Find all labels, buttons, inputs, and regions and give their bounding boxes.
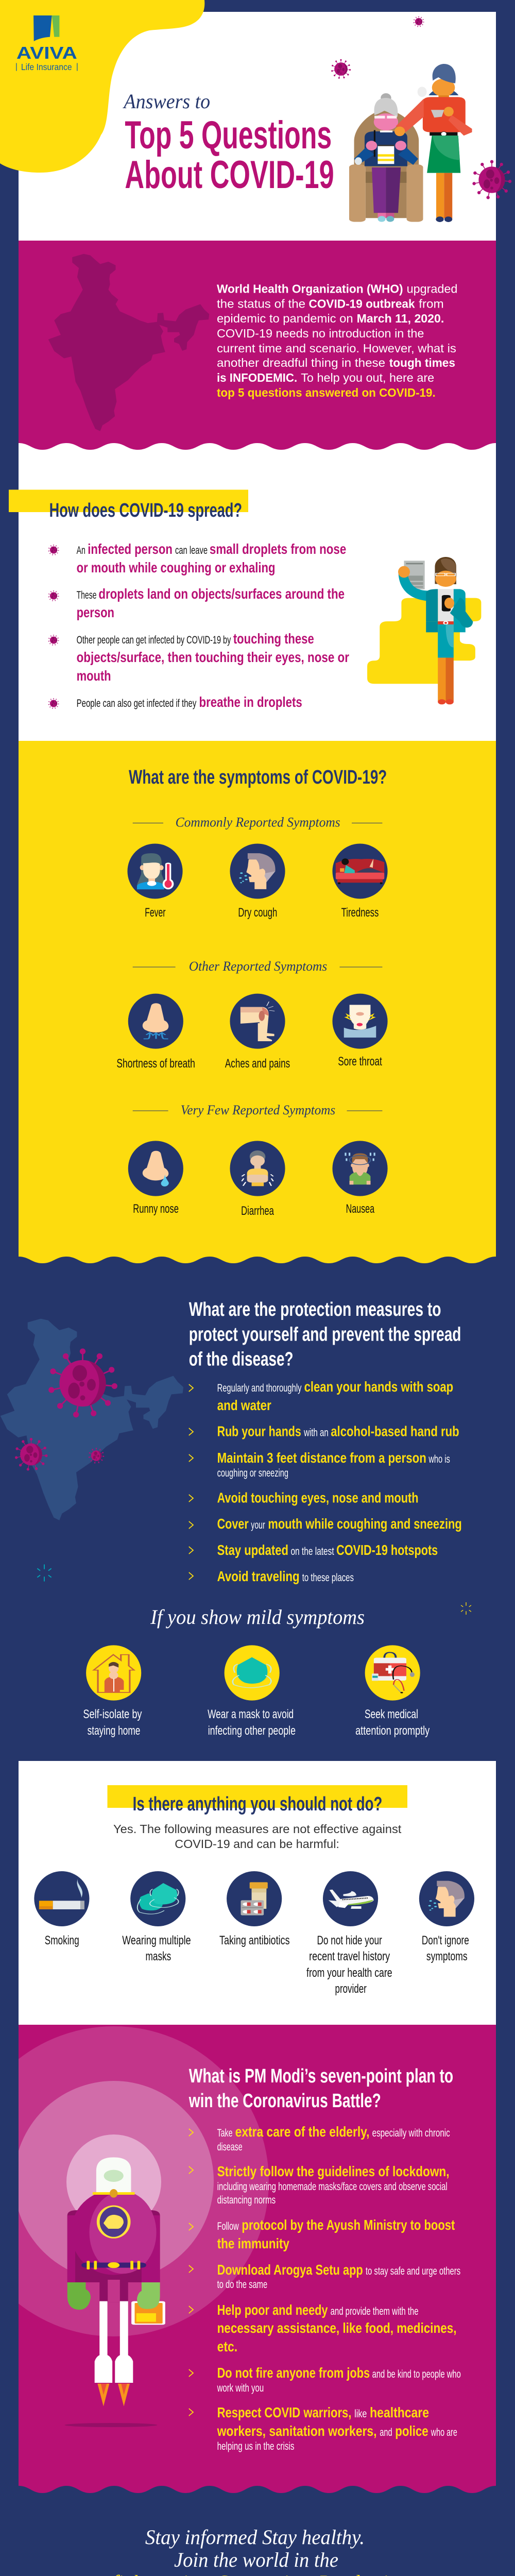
intro text: March 11, 2020.: [357, 313, 444, 326]
bullet: droplets land: person: [77, 604, 114, 620]
intro text: upgraded: [407, 283, 457, 296]
map of India with viruses: [1, 1319, 183, 1520]
logo: Aviva: Life Insurance: [21, 62, 72, 73]
list: seven points: including wearing homemade masks/face covers and observe social: [217, 2180, 448, 2193]
illustration: rocket robot: [67, 2157, 165, 2406]
illustration: elderly woman in armchair: [349, 93, 423, 222]
concentric glow circles: [0, 2026, 269, 2336]
label: provider: [335, 1982, 367, 1996]
list: protection measures: mouth while coughing and sneezing: [268, 1516, 462, 1532]
intro text: tough times: [389, 357, 455, 370]
label: [355, 1708, 430, 1738]
icon: face mask: [225, 1645, 280, 1701]
icon: sore throat: [332, 994, 388, 1049]
list: protection measures: with an: [303, 1426, 329, 1438]
label: Wear a mask to avoid: [208, 1708, 294, 1721]
list: protection measures: alcohol-based hand rub: [331, 1423, 459, 1439]
list: seven points: Take: [217, 2127, 233, 2139]
yellow wave background: [19, 741, 496, 1263]
heading: What is PM Modi’s seven-point plan to: [189, 2064, 453, 2087]
list: seven points: to stay safe and urge others: [366, 2265, 460, 2277]
panel: symptoms: [19, 741, 496, 1263]
label: [422, 1934, 469, 1963]
list: seven points: healthcare: [370, 2404, 429, 2420]
label: [122, 1934, 191, 1963]
icon: large virus: [472, 160, 512, 199]
list: protection measures: Cover: [217, 1516, 249, 1532]
panel: intro: [19, 241, 496, 450]
list: seven points: like: [354, 2408, 367, 2420]
label: Aches and pains: [225, 1057, 290, 1071]
bullet: touching objects: touching these: [233, 631, 314, 647]
map of India: [48, 254, 209, 431]
label: Sore throat: [338, 1055, 382, 1069]
bullet: infected person: [48, 541, 346, 575]
heading: protect yourself and prevent the spread: [189, 1323, 461, 1345]
icon: small virus: [413, 16, 424, 27]
heading: Is there anything you should not do?: [133, 1792, 382, 1815]
list: protection measures: Regularly and thoroughly: [217, 1382, 302, 1394]
subheading: very few reported: Very Few Reported Symptoms: [181, 1103, 335, 1117]
icon: diarrhea: [230, 1141, 285, 1196]
label: [83, 1708, 142, 1738]
label: Seek medical: [365, 1708, 418, 1721]
label: Diarrhea: [241, 1205, 274, 1218]
intro text: current time and scenario. However, what is: [217, 343, 456, 355]
yellow blob: [0, 0, 204, 173]
list: protection measures: [189, 1379, 462, 1584]
list: seven points: etc.: [217, 2338, 237, 2354]
closing message: Stay informed Stay healthy.: [145, 2526, 365, 2549]
bullet: infected person: can leave: [175, 544, 208, 556]
label: [208, 1708, 296, 1738]
intro text: [217, 283, 457, 400]
subheading: other reported: Other Reported Symptoms: [189, 959, 327, 974]
magenta wave background: [19, 2025, 496, 2493]
heading: [189, 1298, 461, 1370]
illustration: woman with newspaper and phone: [367, 557, 481, 704]
illustration: caregiver woman with cup: [394, 64, 472, 222]
icon: tiredness: [332, 844, 388, 899]
list: seven points: Help poor and needy: [217, 2302, 328, 2318]
panel: what not to do: [19, 1761, 496, 2025]
label: Wearing multiple: [122, 1934, 191, 1947]
list: seven points: extra care of the elderly,: [235, 2124, 370, 2140]
heading: of the disease?: [189, 1348, 294, 1370]
heading highlight: [107, 1785, 407, 1808]
label: Fever: [145, 906, 166, 920]
icon: airplane: [323, 1871, 378, 1926]
bullet: touching objects: mouth: [77, 668, 111, 684]
bullet: droplets land: These: [77, 589, 97, 601]
bullet: infected person: small droplets from nose: [210, 541, 346, 557]
magenta wave background: [19, 241, 496, 450]
bullet: infected person: infected person: [88, 541, 173, 557]
list: protection measures: Stay updated: [217, 1542, 288, 1558]
heading: How does COVID-19 spread?: [49, 499, 242, 521]
panel: how does COVID-19 spread: [9, 489, 481, 710]
list: seven points: helping us in the crisis: [217, 2440, 295, 2452]
label: Tiredness: [341, 906, 379, 920]
intro text: epidemic to pandemic on: [217, 313, 353, 326]
label: Runny nose: [133, 1202, 179, 1216]
list: seven points: disease: [217, 2141, 243, 2153]
intro text: World Health Organization (WHO): [217, 283, 403, 296]
icon: medium virus: [331, 59, 351, 79]
bullet: droplets land: [48, 586, 345, 620]
list: seven points: workers, sanitation workers,: [217, 2423, 377, 2439]
subheading: commonly reported: Commonly Reported Symptoms: [176, 815, 340, 829]
icon: fever: [127, 844, 183, 899]
label: Smoking: [45, 1934, 79, 1947]
list: seven points: Do not fire anyone from jobs: [217, 2365, 370, 2381]
list: protection measures: your: [251, 1519, 265, 1531]
list: seven points: Follow: [217, 2220, 239, 2232]
label: [306, 1934, 392, 1996]
intro text: To help you out, here are: [301, 372, 434, 385]
list: protection measures: Rub your hands: [217, 1423, 301, 1439]
label: from your health care: [306, 1967, 392, 1980]
heading highlight: [9, 489, 248, 512]
list: protection measures: clean your hands with soap: [304, 1379, 453, 1395]
heading: What are the symptoms of COVID-19?: [129, 766, 387, 788]
list: seven points: work with you: [217, 2382, 264, 2394]
list: seven points: the immunity: [217, 2235, 289, 2251]
label: Self-isolate by: [83, 1708, 142, 1721]
icon: shortness of breath: [128, 994, 183, 1049]
list: protection measures: on the latest: [290, 1545, 334, 1557]
list: protection measures: and water: [217, 1397, 271, 1413]
label: attention promptly: [355, 1724, 430, 1738]
bullet: infected person: An: [77, 544, 85, 556]
list: protection measures: to these places: [302, 1571, 354, 1584]
list: protection measures: who is: [428, 1453, 450, 1465]
list: seven points: Strictly follow the guidelines of lockdown,: [217, 2163, 450, 2179]
closing message: [112, 2526, 401, 2576]
list: seven points: police: [395, 2423, 428, 2439]
label: symptoms: [426, 1950, 468, 1963]
list: protection measures: Maintain 3 feet distance from a person: [217, 1450, 426, 1466]
icon: self-isolate at home: [86, 1645, 141, 1701]
list: seven points: and be kind to people who: [372, 2368, 461, 2380]
list: seven points: especially with chronic: [372, 2127, 450, 2139]
label: masks: [146, 1950, 171, 1963]
list: protection measures: COVID-19 hotspots: [336, 1542, 438, 1558]
icon: antibiotics: [227, 1871, 282, 1926]
list: seven points: [189, 2124, 461, 2452]
list: seven points: distancing norms: [217, 2194, 276, 2206]
logo: Aviva: [16, 15, 77, 73]
label: Taking antibiotics: [219, 1934, 290, 1947]
bullet: touching objects: Other people can get infected by COVID-19 by: [77, 634, 231, 646]
panel: seven-point plan: [0, 2025, 496, 2493]
header white background: [19, 12, 496, 241]
icon: medical kit: [365, 1645, 420, 1701]
bullet: infected person: or mouth while coughing or exhaling: [77, 560, 275, 575]
heading: [188, 2064, 453, 2111]
icon: aches and pains: [230, 994, 285, 1049]
title: [123, 90, 334, 197]
list: seven points: Download Arogya Setu app: [217, 2262, 363, 2278]
icon: smoking: [34, 1871, 89, 1926]
icon: dry cough: [230, 844, 285, 899]
icon: multiple masks: [130, 1871, 185, 1926]
white background behind spread section: [19, 440, 496, 744]
icon: nausea: [332, 1141, 388, 1196]
logo: Aviva: AVIVA: [16, 43, 77, 62]
intro text: [113, 1823, 402, 1851]
panel: protection measures: [1, 1298, 471, 1738]
intro text: top 5 questions answered on COVID-19.: [217, 387, 436, 400]
bullet: breathe in droplets: breathe in droplets: [199, 694, 302, 710]
label: Dry cough: [238, 906, 277, 920]
list: seven points: who are: [431, 2426, 457, 2438]
intro text: from: [419, 298, 444, 311]
label: staying home: [88, 1724, 140, 1738]
intro text: Yes. The following measures are not effective against: [113, 1823, 402, 1836]
list: seven points: to do the same: [217, 2278, 267, 2291]
bullet: touching objects: objects/surface, then touching their eyes, nose or: [77, 649, 349, 665]
label: Nausea: [346, 1202, 375, 1216]
bullet: breathe in droplets: [48, 694, 302, 710]
bullet: touching objects: [48, 631, 349, 684]
title: Top 5 Questions: [125, 113, 332, 157]
list: seven points: necessary assistance, like food, medicines,: [217, 2320, 457, 2336]
intro text: is INFODEMIC.: [217, 372, 297, 385]
list: seven points: and provide them with the: [331, 2305, 419, 2317]
label: Do not hide your: [317, 1934, 382, 1947]
intro text: COVID-19 and can be harmful:: [175, 1838, 339, 1851]
list: seven points: protocol by the Ayush Ministry to boost: [242, 2217, 455, 2233]
robot shadow: [65, 2423, 158, 2427]
heading: win the Coronavirus Battle?: [188, 2089, 381, 2111]
heading: What are the protection measures to: [189, 1298, 441, 1320]
bullet: breathe in droplets: People can also get infected if they: [77, 697, 197, 709]
label: Don't ignore: [422, 1934, 469, 1947]
intro text: COVID-19 needs no introduction in the: [217, 328, 424, 341]
title: Answers to: [123, 90, 210, 113]
intro text: COVID-19 outbreak: [309, 298, 415, 311]
list: protection measures: Avoid touching eyes, nose and mouth: [217, 1489, 419, 1505]
title: About COVID-19: [125, 152, 334, 197]
label: infecting other people: [208, 1724, 296, 1738]
label: recent travel history: [309, 1950, 390, 1963]
label: Shortness of breath: [116, 1057, 195, 1071]
heading: mild symptoms: If you show mild symptoms: [150, 1606, 365, 1629]
panel: header: [0, 0, 512, 241]
icon: ignoring symptoms: [419, 1871, 474, 1926]
icon: runny nose: [128, 1141, 183, 1196]
intro text: another dreadful thing in these: [217, 357, 385, 370]
list: protection measures: coughing or sneezing: [217, 1467, 288, 1479]
list: seven points: and: [380, 2426, 392, 2438]
icon: yellow sparkle: [461, 1602, 471, 1615]
icon: teal sparkle: [37, 1564, 52, 1582]
list: protection measures: Avoid traveling: [217, 1568, 300, 1584]
list: seven points: Respect COVID warriors,: [217, 2404, 351, 2420]
white background: [19, 1761, 496, 2025]
closing message: Join the world in the: [174, 2549, 338, 2572]
bullet: droplets land: droplets land on objects/surfaces around the: [98, 586, 345, 602]
intro text: the status of the: [217, 298, 305, 311]
